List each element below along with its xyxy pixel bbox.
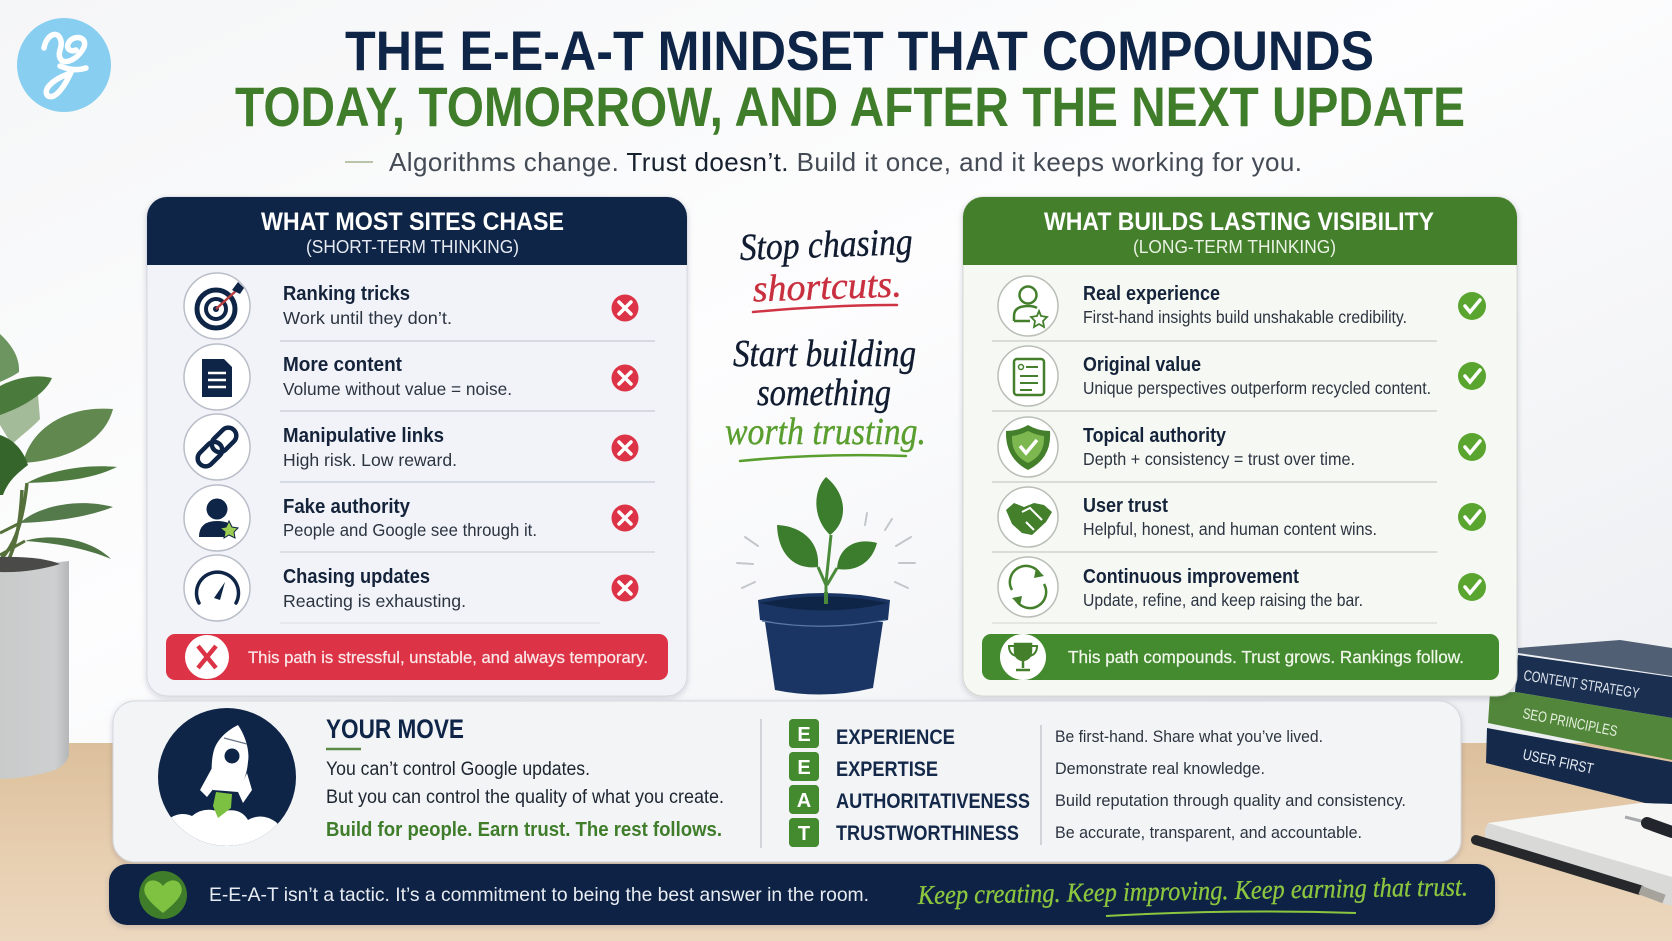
right panel heading: WHAT BUILDS LASTING VISIBILITY <box>1044 208 1434 236</box>
right panel subheading: (LONG-TERM THINKING) <box>1133 237 1336 257</box>
E-E-A-T list: A <box>797 790 811 812</box>
footer statement: E-E-A-T isn’t a tactic. It’s a commitment to being the best answer in the room. <box>209 884 869 906</box>
decorative book stack <box>1486 640 1672 807</box>
panel: what most sites chase <box>147 197 687 696</box>
decorative potted plant <box>0 334 117 779</box>
icon: heart <box>139 871 187 919</box>
row: real experience <box>998 276 1486 336</box>
title <box>235 19 1465 138</box>
left panel subheading: (SHORT-TERM THINKING) <box>306 237 519 257</box>
row: manipulative links <box>184 414 638 480</box>
success bar: This path compounds. Trust grows. Rankings follow. <box>1068 647 1464 667</box>
handwriting: start building: Start building <box>733 333 916 375</box>
row: original value <box>998 346 1486 406</box>
wooden desk <box>0 743 1672 941</box>
row: fake authority: Fake authority <box>283 496 411 518</box>
handwriting: stop chasing: Stop chasing <box>739 221 913 269</box>
title line 2: TODAY, TOMORROW, AND AFTER THE NEXT UPDATE <box>235 75 1465 138</box>
row: more content <box>184 344 638 410</box>
E-E-A-T list: Demonstrate real knowledge. <box>1055 760 1265 778</box>
icon: rocket badge <box>158 708 300 850</box>
footer handwriting: Keep creating. Keep improving. Keep earning that trust. <box>917 871 1468 910</box>
row: topical authority: Topical authority <box>1083 425 1227 447</box>
center message <box>725 221 926 461</box>
handwriting: something: something <box>757 372 891 414</box>
panel: your move <box>113 701 1461 862</box>
title line 1: THE E-E-A-T MINDSET THAT COMPOUNDS <box>345 19 1374 82</box>
E-E-A-T list: Be accurate, transparent, and accountable. <box>1055 824 1362 842</box>
row: topical authority: Depth + consistency = trust over time. <box>1083 449 1355 469</box>
warning bar <box>166 634 668 680</box>
row: chasing updates: Reacting is exhausting. <box>283 591 466 611</box>
book label: user first: USER FIRST <box>1521 746 1595 778</box>
row: continuous improvement: Update, refine, and keep raising the bar. <box>1083 590 1363 610</box>
panel: what builds lasting visibility <box>963 197 1517 696</box>
row: chasing updates: Chasing updates <box>283 566 430 588</box>
your move text <box>326 759 724 841</box>
E-E-A-T list: E <box>797 724 811 746</box>
your move text: Build for people. Earn trust. The rest follows. <box>326 819 722 841</box>
row: more content: Volume without value = noise. <box>283 379 512 399</box>
row: fake authority <box>184 485 638 551</box>
decorative notebook and pens <box>1476 803 1672 905</box>
E-E-A-T list: EXPERTISE <box>836 758 938 781</box>
row: continuous improvement <box>998 557 1486 617</box>
row: original value: Original value <box>1083 354 1201 376</box>
decorative concrete pot <box>0 561 69 779</box>
row: continuous improvement: Continuous improvement <box>1083 566 1299 588</box>
E-E-A-T list: AUTHORITATIVENESS <box>836 790 1030 813</box>
row: real experience: First-hand insights build unshakable credibility. <box>1083 307 1407 327</box>
row: manipulative links: High risk. Low reward. <box>283 450 457 470</box>
handwriting: worth trusting: worth trusting. <box>725 411 926 453</box>
E-E-A-T list <box>789 719 1406 847</box>
row: fake authority: People and Google see through it. <box>283 520 537 540</box>
left panel heading: WHAT MOST SITES CHASE <box>261 208 564 236</box>
row: manipulative links: Manipulative links <box>283 425 444 447</box>
your move text: But you can control the quality of what you create. <box>326 787 724 808</box>
E-E-A-T list: Be first-hand. Share what you’ve lived. <box>1055 728 1323 746</box>
row: topical authority <box>998 417 1486 477</box>
handwriting: shortcuts: shortcuts. <box>752 263 902 311</box>
E-E-A-T list: T <box>798 823 810 845</box>
logo <box>17 18 111 112</box>
E-E-A-T list: TRUSTWORTHINESS <box>836 822 1019 845</box>
row: user trust: Helpful, honest, and human content wins. <box>1083 519 1377 539</box>
background wall <box>0 0 1672 745</box>
E-E-A-T list: E <box>797 757 811 779</box>
footer bar <box>109 864 1495 925</box>
row: real experience: Real experience <box>1083 283 1220 305</box>
row: chasing updates <box>184 555 638 621</box>
E-E-A-T list: EXPERIENCE <box>836 726 955 749</box>
row: ranking tricks <box>184 273 638 339</box>
success bar <box>982 634 1499 680</box>
row: ranking tricks: Ranking tricks <box>283 283 410 305</box>
icon: growing plant in pot <box>737 477 915 695</box>
your move text: You can’t control Google updates. <box>326 759 590 780</box>
warning bar: This path is stressful, unstable, and always temporary. <box>248 648 648 667</box>
row: original value: Unique perspectives outperform recycled content. <box>1083 378 1431 398</box>
row: ranking tricks: Work until they don’t. <box>283 308 452 328</box>
your move heading: YOUR MOVE <box>326 714 464 744</box>
row: user trust <box>998 487 1486 547</box>
E-E-A-T list: Build reputation through quality and consistency. <box>1055 792 1406 810</box>
subtitle: Algorithms change. Trust doesn’t. Build it once, and it keeps working for you. <box>389 147 1302 177</box>
row: more content: More content <box>283 354 402 376</box>
book label: seo principles: SEO PRINCIPLES <box>1521 705 1619 740</box>
row: user trust: User trust <box>1083 495 1168 517</box>
